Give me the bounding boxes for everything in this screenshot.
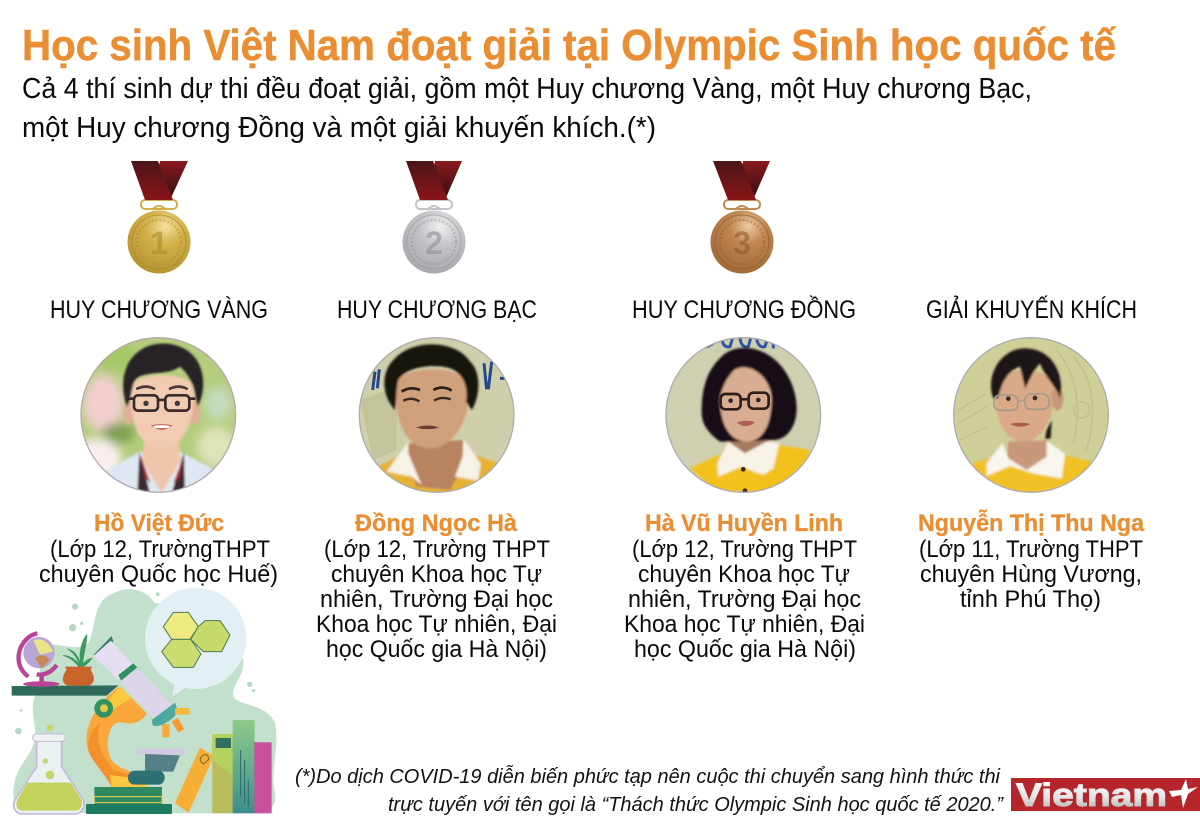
name: Hồ Việt Đức: Hồ Việt Đức [94,510,224,537]
icon: gold medal: 1 [150,225,168,261]
footnote: trực tuyến với tên gọi là “Thách thức Olympic Sinh học quốc tế 2020.” [388,793,1004,816]
flask [14,725,84,814]
school: Hà Vũ Huyền Linh: nhiên, Trường Đại học [628,586,861,613]
icon: bronze medal: 3 [733,225,751,261]
label: bronze medal: HUY CHƯƠNG ĐỒNG [632,294,856,324]
icon: bronze medal [710,161,774,274]
name: Hà Vũ Huyền Linh: Hà Vũ Huyền Linh [645,510,843,537]
school: Hà Vũ Huyền Linh: Khoa học Tự nhiên, Đại [624,611,865,638]
school: Hà Vũ Huyền Linh: (Lớp 12, Trường THPT [632,536,857,563]
subtitle [22,73,1032,144]
label: silver medal: HUY CHƯƠNG BẠC [337,296,537,324]
school: Đồng Ngọc Hà: học Quốc gia Hà Nội) [326,636,547,663]
microscope [86,636,190,814]
school: Đồng Ngọc Hà: chuyên Khoa học Tự [331,561,542,588]
school: Đồng Ngọc Hà: Khoa học Tự nhiên, Đại [316,611,557,638]
portrait: Nguyễn Thị Thu Nga [952,335,1112,497]
school: Hồ Việt Đức: chuyên Quốc học Huế) [39,561,278,588]
portrait: Hồ Việt Đức [80,337,236,493]
name: Nguyễn Thị Thu Nga: Nguyễn Thị Thu Nga [918,509,1145,537]
icon: silver medal [402,161,466,274]
books [175,720,272,813]
school: Đồng Ngọc Hà: (Lớp 12, Trường THPT [324,536,550,563]
subtitle: một Huy chương Đồng và một giải khuyến khích.(*) [22,112,656,144]
decorative dots [15,592,255,734]
school: Hà Vũ Huyền Linh: học Quốc gia Hà Nội) [634,636,856,663]
school: Nguyễn Thị Thu Nga: chuyên Hùng Vương, [920,561,1142,588]
label: encouragement prize: GIẢI KHUYẾN KHÍCH [926,294,1137,324]
school: Hà Vũ Huyền Linh: chuyên Khoa học Tự [638,561,850,588]
shelf [12,685,118,696]
school: Hồ Việt Đức [39,536,278,588]
label: gold medal: HUY CHƯƠNG VÀNG [50,295,268,324]
plant pot [63,634,94,686]
icon: gold medal [128,161,190,274]
speech bubble with hexagons [145,588,246,697]
school: Đồng Ngọc Hà: nhiên, Trường Đại học [320,586,553,613]
portrait: Hà Vũ Huyền Linh [663,335,823,495]
school: Nguyễn Thị Thu Nga: tỉnh Phú Thọ) [960,586,1101,613]
school: Hồ Việt Đức: (Lớp 12, TrườngTHPT [50,536,270,563]
school: Hà Vũ Huyền Linh [624,536,865,663]
footnote [295,765,1004,816]
icon: silver medal: 2 [425,225,443,261]
footnote: (*)Do dịch COVID-19 diễn biến phức tạp nên cuộc thi chuyển sang hình thức thi [295,765,1001,788]
name: Đồng Ngọc Hà: Đồng Ngọc Hà [355,510,518,537]
subtitle: Cả 4 thí sinh dự thi đều đoạt giải, gồm một Huy chương Vàng, một Huy chương Bạc, [22,73,1032,105]
background blob [13,589,276,813]
portrait: Đồng Ngọc Hà [357,335,517,497]
school: Đồng Ngọc Hà [316,536,557,663]
title: Học sinh Việt Nam đoạt giải tại Olympic Sinh học quốc tế [22,21,1116,70]
globe [19,633,60,687]
illustration: science lab [12,588,276,814]
logo: Vietnam+ [1011,777,1200,813]
logo: Vietnam+: Vietnam [1016,777,1167,813]
school: Nguyễn Thị Thu Nga: (Lớp 11, Trường THPT [919,536,1143,563]
school: Nguyễn Thị Thu Nga [919,536,1143,613]
